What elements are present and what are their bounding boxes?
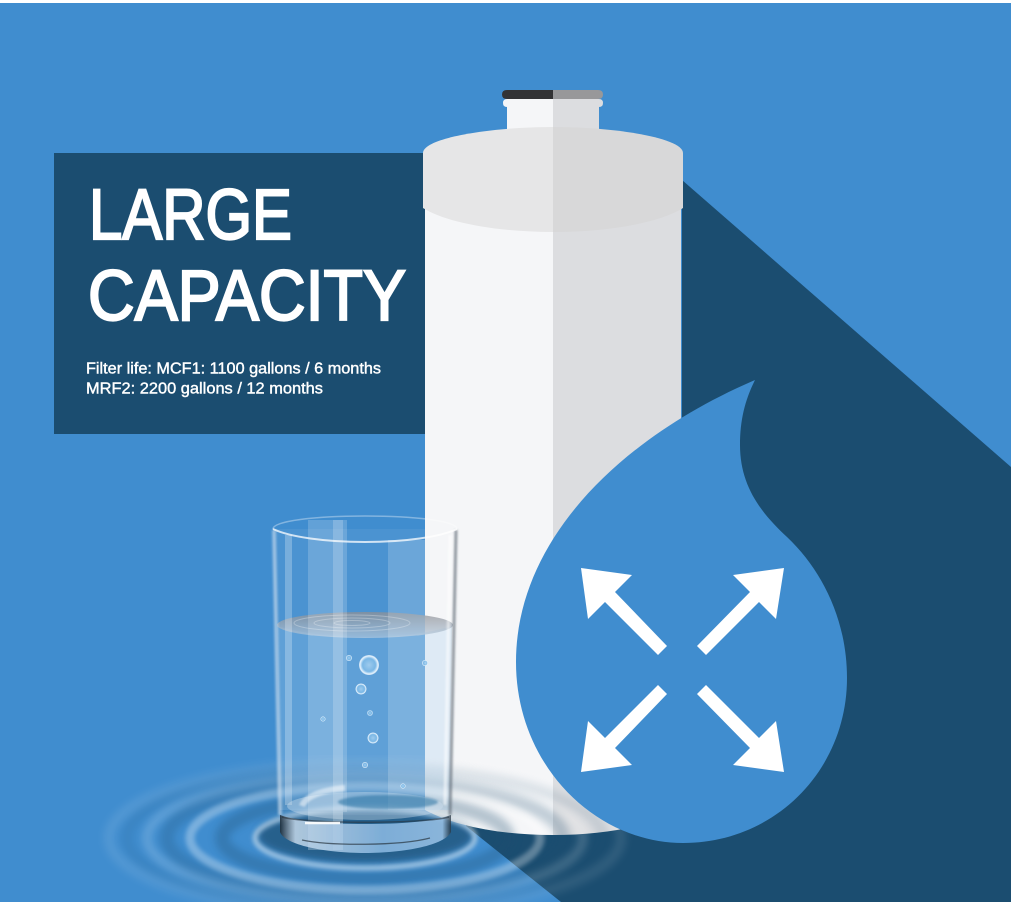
glass inner bottom xyxy=(287,788,443,820)
water surface xyxy=(277,612,453,638)
filter cap xyxy=(423,127,683,232)
panel: title box xyxy=(54,153,426,434)
vertical light streaks xyxy=(285,520,425,850)
filter neck xyxy=(503,99,603,134)
arrow down-left xyxy=(581,685,667,772)
water drop icon xyxy=(516,380,847,843)
bubbles xyxy=(320,655,428,789)
filter life text: Filter life: MCF1: 1100 gallons / 6 months xyxy=(86,360,381,378)
surface ripples xyxy=(294,615,410,631)
water ripples xyxy=(109,763,621,902)
filter life text: MRF2: 2200 gallons / 12 months xyxy=(86,380,323,398)
glass of water xyxy=(273,516,457,853)
water xyxy=(277,626,452,810)
long shadow xyxy=(466,180,1011,902)
glass base xyxy=(280,815,451,853)
arrow down-right xyxy=(697,685,784,772)
glass rim xyxy=(273,516,457,542)
glass walls xyxy=(274,530,456,815)
filter cartridge xyxy=(423,90,683,835)
heading xyxy=(88,176,406,336)
arrow up-right xyxy=(697,568,784,655)
heading: CAPACITY xyxy=(88,257,406,336)
glass body tint xyxy=(273,529,457,815)
filter life text xyxy=(86,360,381,398)
filter cap band xyxy=(502,90,603,99)
filter body xyxy=(425,200,681,835)
heading: LARGE xyxy=(89,176,292,255)
arrow up-left xyxy=(581,568,667,655)
